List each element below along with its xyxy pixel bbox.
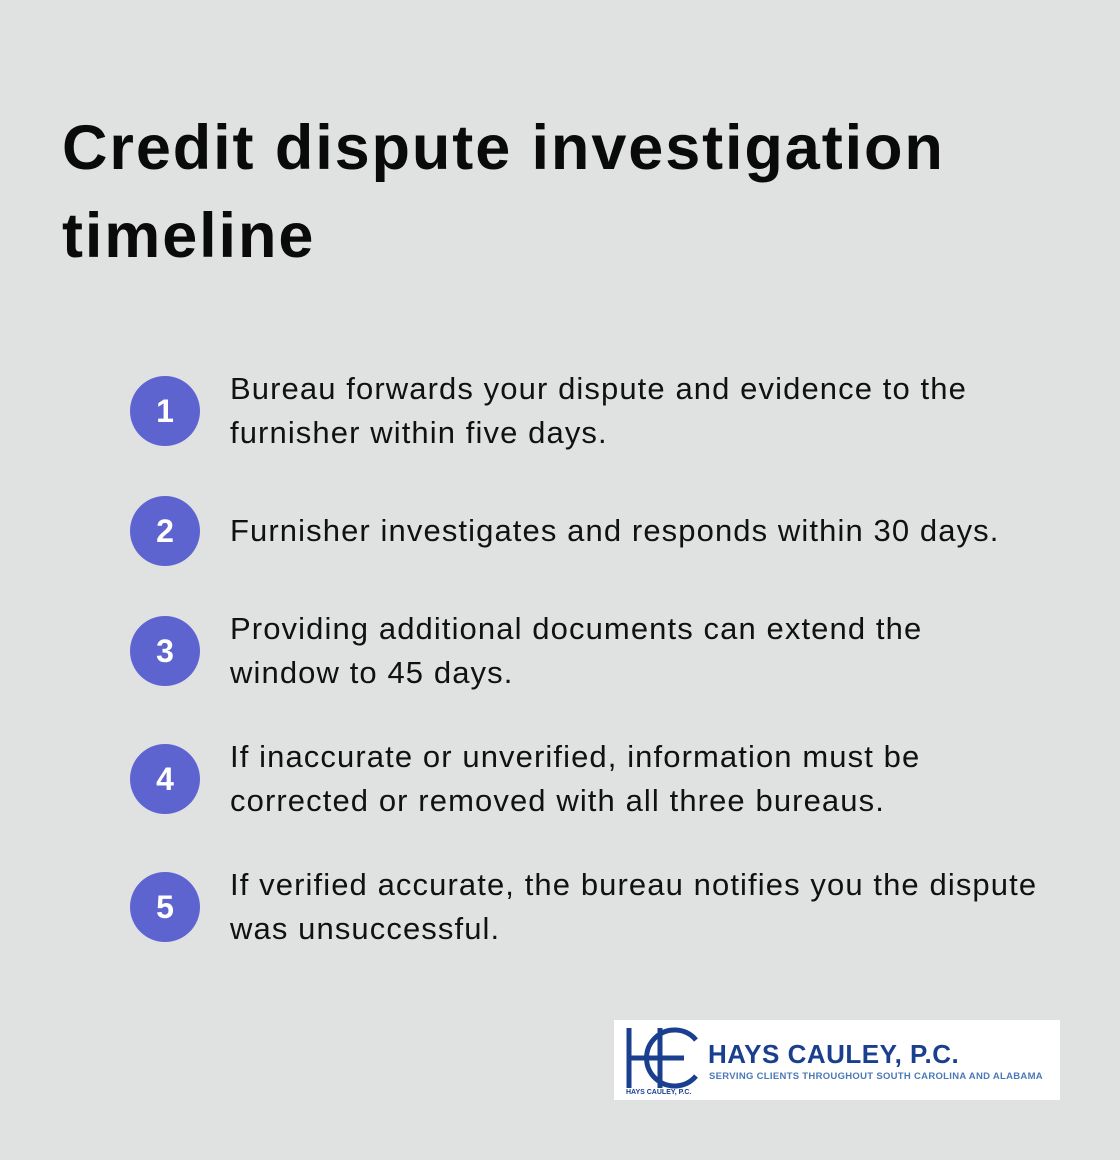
step 2 xyxy=(130,496,1000,566)
step 1 xyxy=(130,371,967,450)
step 5: If verified accurate, the bureau notifies you the dispute xyxy=(230,867,1037,902)
step 5: 5 xyxy=(156,889,174,925)
step 4: 4 xyxy=(156,761,174,797)
step 4 xyxy=(130,739,920,818)
step 2: Furnisher investigates and responds within 30 days. xyxy=(230,513,1000,548)
step 3: window to 45 days. xyxy=(230,655,513,690)
step 5: was unsuccessful. xyxy=(230,911,500,946)
step 3 xyxy=(130,611,922,690)
step 1: furnisher within five days. xyxy=(230,415,608,450)
title: Credit dispute investigation xyxy=(62,113,945,183)
logo small text: HAYS CAULEY, P.C. xyxy=(626,1089,691,1096)
title xyxy=(62,113,945,271)
step 1: Bureau forwards your dispute and evidence to the xyxy=(230,371,967,406)
step 4: If inaccurate or unverified, information must be xyxy=(230,739,920,774)
step 3: Providing additional documents can extend the xyxy=(230,611,922,646)
logo xyxy=(614,1020,1060,1100)
step 4: corrected or removed with all three bureaus. xyxy=(230,783,885,818)
step 2: 2 xyxy=(156,513,174,549)
step 3: 3 xyxy=(156,633,174,669)
step 5 xyxy=(130,867,1037,946)
logo name: HAYS CAULEY, P.C. xyxy=(708,1039,959,1069)
logo tagline: SERVING CLIENTS THROUGHOUT SOUTH CAROLINA AND ALABAMA xyxy=(709,1071,1043,1082)
title: timeline xyxy=(62,201,315,271)
logo mark xyxy=(626,1028,698,1088)
step 1: 1 xyxy=(156,393,174,429)
